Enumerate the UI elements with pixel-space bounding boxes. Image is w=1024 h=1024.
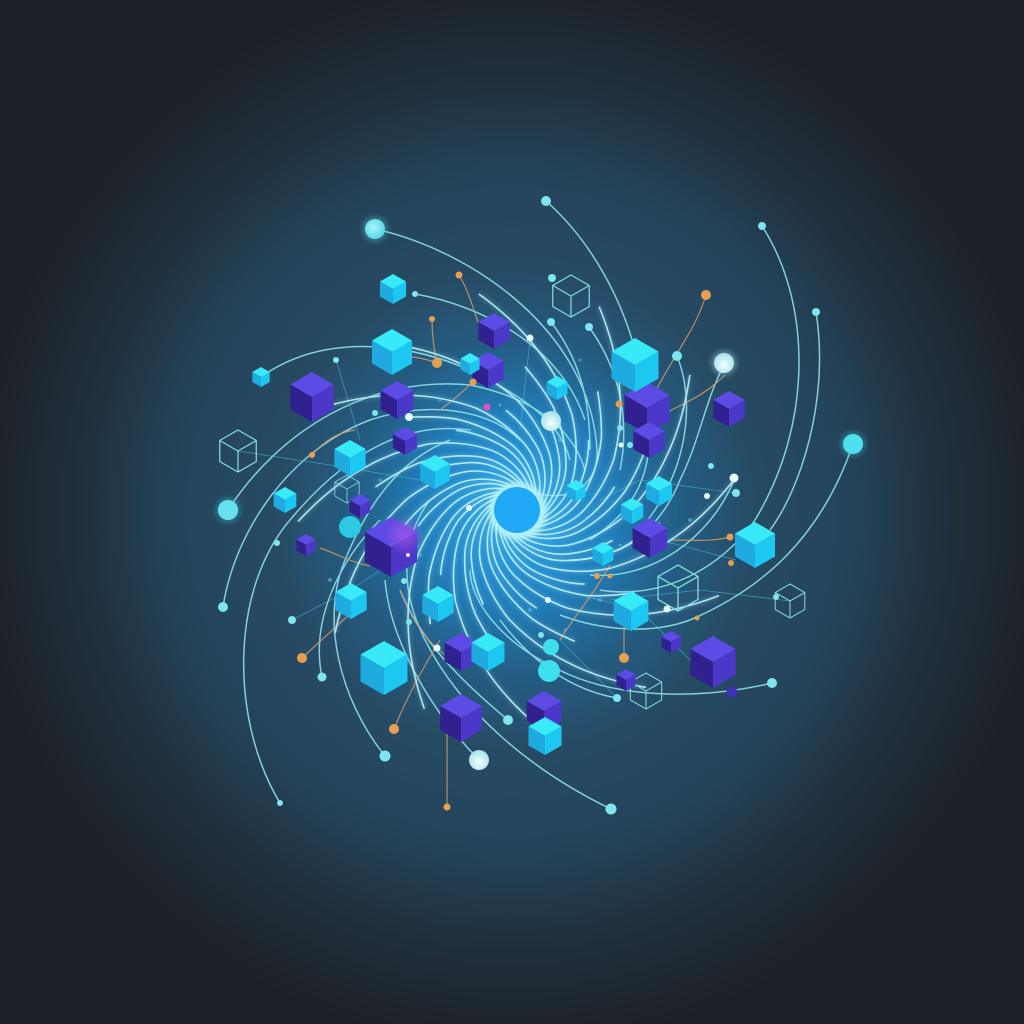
long orbit lines: [223, 201, 853, 809]
vortex core: [489, 482, 547, 540]
central glow: [277, 270, 757, 750]
purple accent node: [726, 686, 738, 698]
large glowing nodes: [215, 216, 866, 770]
small cyan nodes: [218, 196, 820, 814]
orange nodes: [297, 272, 734, 810]
faint blue speckles: [328, 358, 692, 632]
cyan cubes: [252, 274, 775, 755]
magenta highlights on large purple cube: [391, 404, 490, 557]
spiral vortex: [298, 294, 734, 728]
purple cubes: [290, 313, 745, 742]
thin network lines: [238, 340, 790, 698]
spiral glow: [298, 294, 734, 728]
wireframe cubes: [220, 275, 805, 709]
orange connector lines: [302, 275, 730, 807]
white sparkle nodes: [405, 334, 738, 652]
